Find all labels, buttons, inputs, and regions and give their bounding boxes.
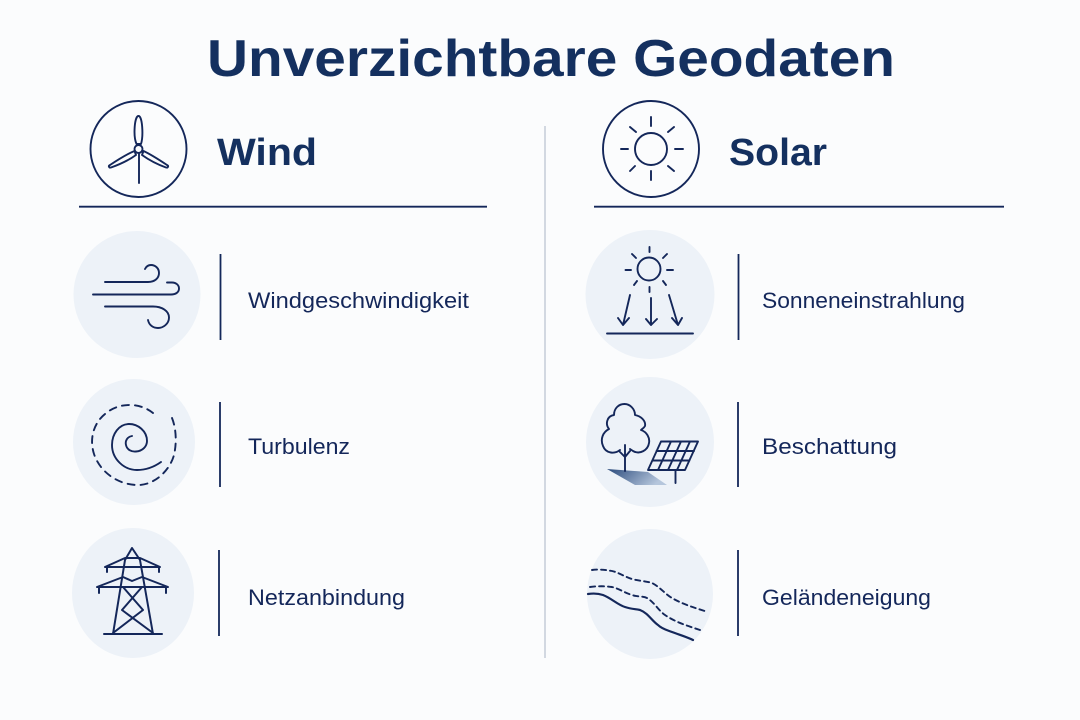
icon: solar irradiation — [586, 230, 714, 359]
icon: terrain slope — [587, 529, 713, 659]
label: Netzanbindung — [248, 585, 405, 610]
item: Turbulenz — [73, 379, 350, 505]
divider — [220, 254, 222, 340]
icon: turbulence spiral — [73, 379, 195, 505]
label: Geländeneigung — [762, 585, 931, 610]
icon: wind lines — [74, 231, 200, 358]
item: Beschattung — [586, 377, 897, 507]
label: Sonneneinstrahlung — [762, 288, 965, 313]
item: Sonneneinstrahlung — [586, 230, 965, 359]
divider — [737, 402, 739, 487]
panel: wind — [72, 101, 487, 658]
panel: solar — [586, 101, 1004, 659]
heading: wind: Wind — [217, 132, 317, 174]
icon: transmission tower — [72, 528, 194, 658]
item: Netzanbindung — [72, 528, 405, 658]
item: Geländeneigung — [587, 529, 931, 659]
label: Turbulenz — [248, 434, 350, 459]
icon: sun — [603, 101, 699, 197]
icon: tree and solar panel — [586, 377, 714, 507]
item: Windgeschwindigkeit — [74, 231, 469, 358]
divider — [737, 550, 739, 636]
heading: solar: Solar — [729, 132, 827, 174]
heading rule — [79, 206, 487, 208]
icon: wind turbine — [90, 101, 186, 197]
column divider — [544, 126, 546, 658]
title: Unverzichtbare Geodaten — [207, 30, 895, 88]
label: Windgeschwindigkeit — [248, 288, 469, 313]
divider — [738, 254, 740, 340]
divider — [219, 402, 221, 487]
label: Beschattung — [762, 434, 897, 459]
heading rule — [594, 206, 1004, 208]
divider — [218, 550, 220, 636]
